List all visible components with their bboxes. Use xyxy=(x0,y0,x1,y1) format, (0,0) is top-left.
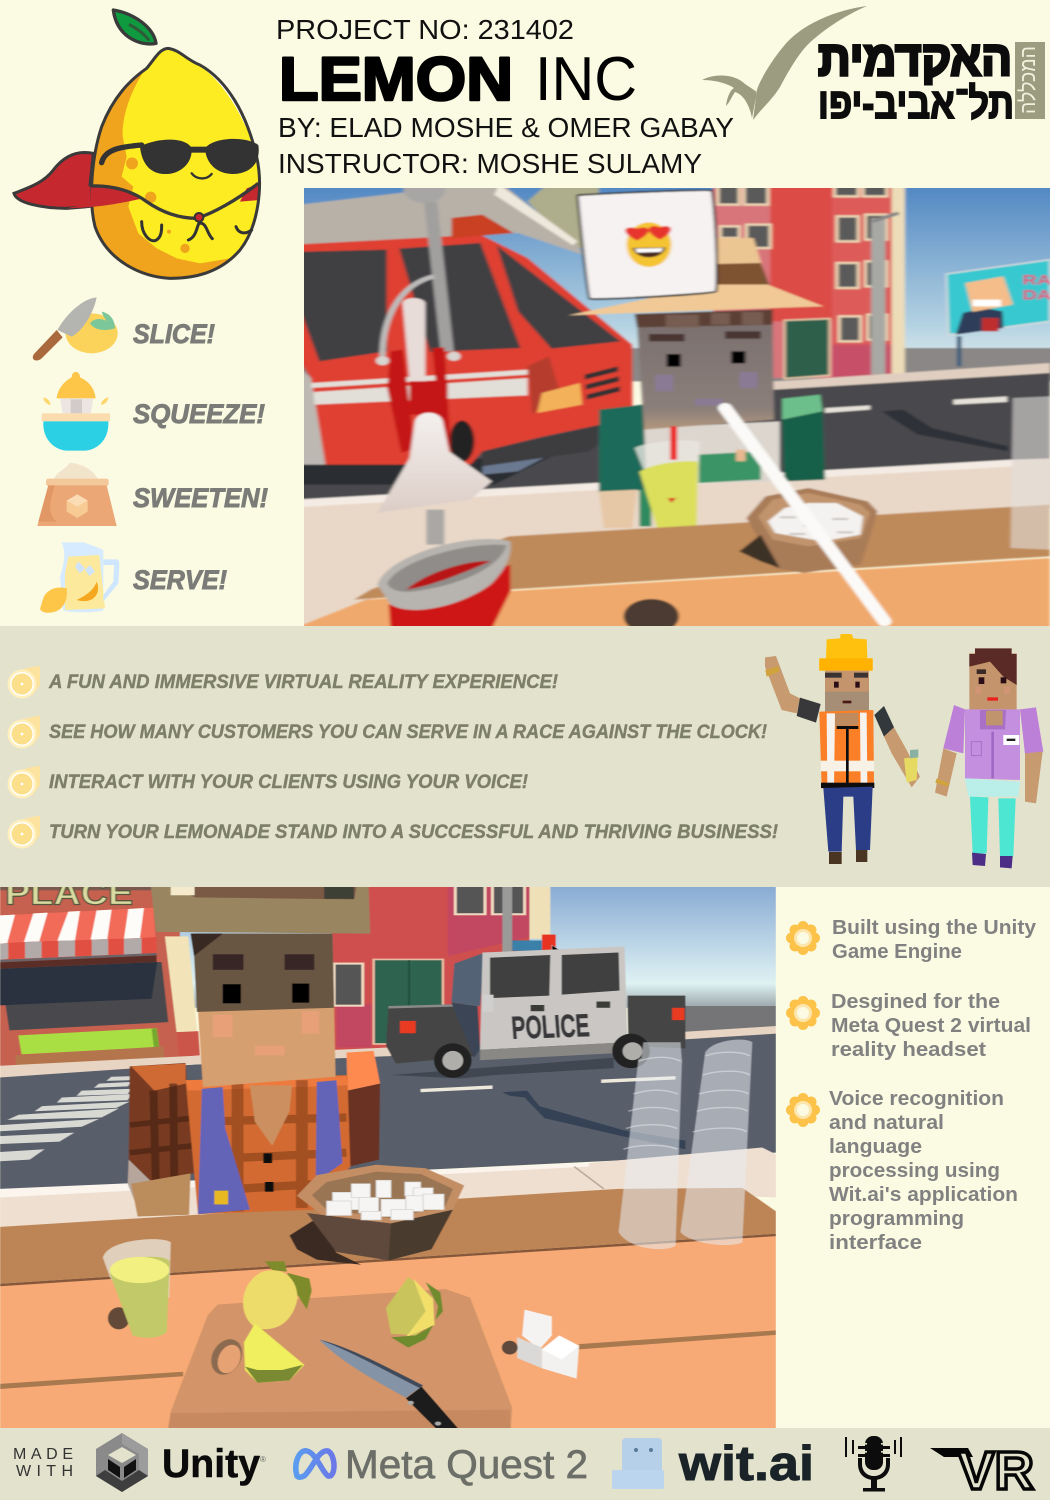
made with label xyxy=(13,1446,73,1480)
icon: knife and lemon xyxy=(33,297,118,360)
logo: Tel Aviv-Yaffo Academic College xyxy=(702,6,1045,128)
note: voice recognition: Wit.ai's application xyxy=(829,1183,1018,1206)
screenshot: lemonade stand gameplay: POLICE xyxy=(510,1008,591,1046)
wit.ai wordmark: wit.ai xyxy=(678,1437,814,1491)
logo Hebrew name: האקדמית xyxy=(818,32,1012,86)
text: instructor: INSTRUCTOR: MOSHE SULAMY xyxy=(278,148,702,179)
icon: microphone xyxy=(845,1436,902,1492)
bullet icon: lemon xyxy=(8,766,40,798)
mascot cape band xyxy=(67,186,140,208)
mascot outline xyxy=(92,48,259,278)
Unity wordmark: Unity xyxy=(162,1442,261,1486)
panel: feature band xyxy=(0,626,1050,887)
Unity wordmark: ® xyxy=(260,1455,266,1464)
text: slice: SLICE! xyxy=(133,319,215,349)
note: voice recognition: language xyxy=(829,1135,922,1158)
Unity cube icon xyxy=(96,1433,148,1492)
mascot knot xyxy=(195,213,203,222)
note: voice recognition: and natural xyxy=(829,1111,944,1134)
note: Unity: Built using the Unity xyxy=(832,916,1037,939)
mascot cape xyxy=(14,152,138,208)
panel: logo strip xyxy=(0,1428,1050,1500)
wit.ai robot xyxy=(612,1438,664,1489)
bullet: voice interaction xyxy=(8,766,528,798)
Meta infinity mark xyxy=(296,1451,334,1477)
text: sweeten: SWEETEN! xyxy=(133,483,268,513)
Meta Quest wordmark: Meta Quest 2 xyxy=(345,1443,588,1487)
note: voice recognition: processing using xyxy=(829,1159,1000,1182)
logo side text: המכללה xyxy=(1015,46,1040,114)
logo swoosh xyxy=(702,6,867,120)
note: Meta Quest 2: reality headset xyxy=(831,1038,986,1061)
icon: gear xyxy=(786,921,820,955)
screenshot: lemonade stand gameplay xyxy=(0,874,776,1428)
icon: gear xyxy=(786,1093,820,1127)
bullet: race against the clock: SEE HOW MANY CUSTOMERS YOU CAN SERVE IN A RACE AGAINST THE CLOCK! xyxy=(49,722,767,743)
note: voice recognition: interface xyxy=(829,1231,922,1254)
bullet: virtual reality experience xyxy=(8,666,558,698)
panel: tech notes column xyxy=(776,887,1050,1428)
icon: gear xyxy=(786,996,820,1030)
bullet: voice interaction: INTERACT WITH YOUR CLIENTS USING YOUR VOICE! xyxy=(49,772,528,793)
note: Unity: Game Engine xyxy=(832,940,962,963)
businesswoman xyxy=(935,648,1043,868)
mascot sunglasses xyxy=(102,139,259,174)
made with label: WITH xyxy=(16,1463,73,1480)
icon: lemonade jug xyxy=(40,542,119,613)
mascot cape ties xyxy=(91,183,258,218)
logo: Meta Quest 2 xyxy=(296,1443,588,1487)
bullet: virtual reality experience: A FUN AND IMMERSIVE VIRTUAL REALITY EXPERIENCE! xyxy=(48,672,558,693)
characters: construction worker and businesswoman xyxy=(765,634,1043,868)
logo: wit.ai xyxy=(612,1437,814,1491)
bullet: thriving business: TURN YOUR LEMONADE STAND INTO A SUCCESSFUL AND THRIVING BUSINESS! xyxy=(49,822,778,843)
screenshot: VR customer at the stand xyxy=(304,188,1050,626)
text: squeeze: SQUEEZE! xyxy=(133,399,265,429)
note: voice recognition: Voice recognition xyxy=(829,1087,1004,1110)
mascot chest marks xyxy=(142,222,252,241)
note: voice recognition xyxy=(786,1087,1018,1254)
icon: lemon superhero mascot xyxy=(14,10,260,287)
mascot leaf xyxy=(113,10,156,44)
logo Hebrew city: תל־אביב-יפו xyxy=(818,80,1014,128)
bullet: thriving business xyxy=(8,816,778,848)
note: Meta Quest 2: Desgined for the xyxy=(831,990,1000,1013)
icon: sugar sack xyxy=(37,463,117,526)
text: serve: SERVE! xyxy=(133,565,227,595)
title: LEMON INC: LEMON xyxy=(279,45,513,113)
bullet: race against the clock xyxy=(8,716,767,748)
note: Meta Quest 2: Meta Quest 2 virtual xyxy=(831,1014,1031,1037)
bullet icon: lemon xyxy=(8,716,40,748)
mascot shading xyxy=(93,69,258,277)
icon: citrus juicer xyxy=(42,372,110,451)
construction worker xyxy=(765,634,920,864)
note: voice recognition: programming xyxy=(829,1207,964,1230)
bullet icon: lemon xyxy=(8,816,40,848)
title: LEMON INC xyxy=(279,45,637,114)
logo side tab xyxy=(1015,42,1045,119)
heading: project number: PROJECT NO: 231402 xyxy=(276,14,574,45)
mascot body xyxy=(92,48,259,278)
text: authors: BY: ELAD MOSHE & OMER GABAY xyxy=(278,112,734,143)
title: LEMON INC: INC xyxy=(535,45,637,114)
bullet icon: lemon xyxy=(8,666,40,698)
note: Meta Quest 2 xyxy=(786,990,1031,1061)
logo: VR: VR xyxy=(958,1441,1034,1500)
mascot smile xyxy=(192,173,212,178)
screenshot: lemonade stand gameplay: PLACE xyxy=(5,874,133,912)
note: Unity xyxy=(786,916,1037,963)
made with label: MADE xyxy=(13,1446,73,1463)
logo: made with Unity xyxy=(13,1433,266,1492)
